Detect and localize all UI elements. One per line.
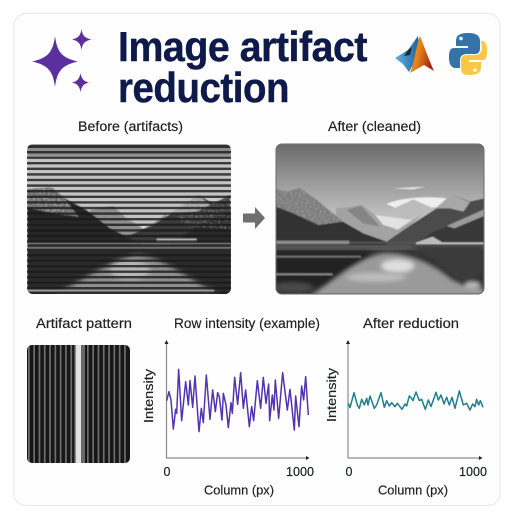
y label: Intensity [142,368,156,423]
x label: Column (px) [204,484,274,498]
line series [167,369,308,432]
horizontal stripe artifacts [27,145,231,294]
heading: artifact pattern: Artifact pattern [36,316,132,331]
chart: after reduction [325,340,487,498]
x ticks [164,465,314,479]
axes [348,342,481,458]
heading: after reduction: After reduction [363,316,459,331]
heading: before: Before (artifacts) [78,119,183,134]
x label: Column (px) [378,484,448,498]
image: artifact pattern [27,345,130,463]
image: before with artifacts [27,144,232,295]
image: after cleaned [273,144,484,297]
axes [166,342,308,458]
line series [348,391,483,410]
x ticks: 1000 [459,465,487,479]
x ticks: 0 [346,465,353,479]
heading: row intensity: Row intensity (example) [174,316,320,331]
title: Image artifact [118,23,367,70]
title [118,23,367,111]
x ticks: 1000 [286,465,314,479]
title: reduction [118,64,289,111]
x ticks: 0 [164,465,171,479]
icon: sparkles [32,29,92,92]
chart: row intensity [142,340,314,498]
y label: Intensity [325,367,339,422]
icon: MATLAB logo [395,36,434,73]
icon: Python logo [449,33,487,75]
arrow [243,207,265,229]
heading: after: After (cleaned) [328,119,421,134]
x ticks [346,465,487,479]
